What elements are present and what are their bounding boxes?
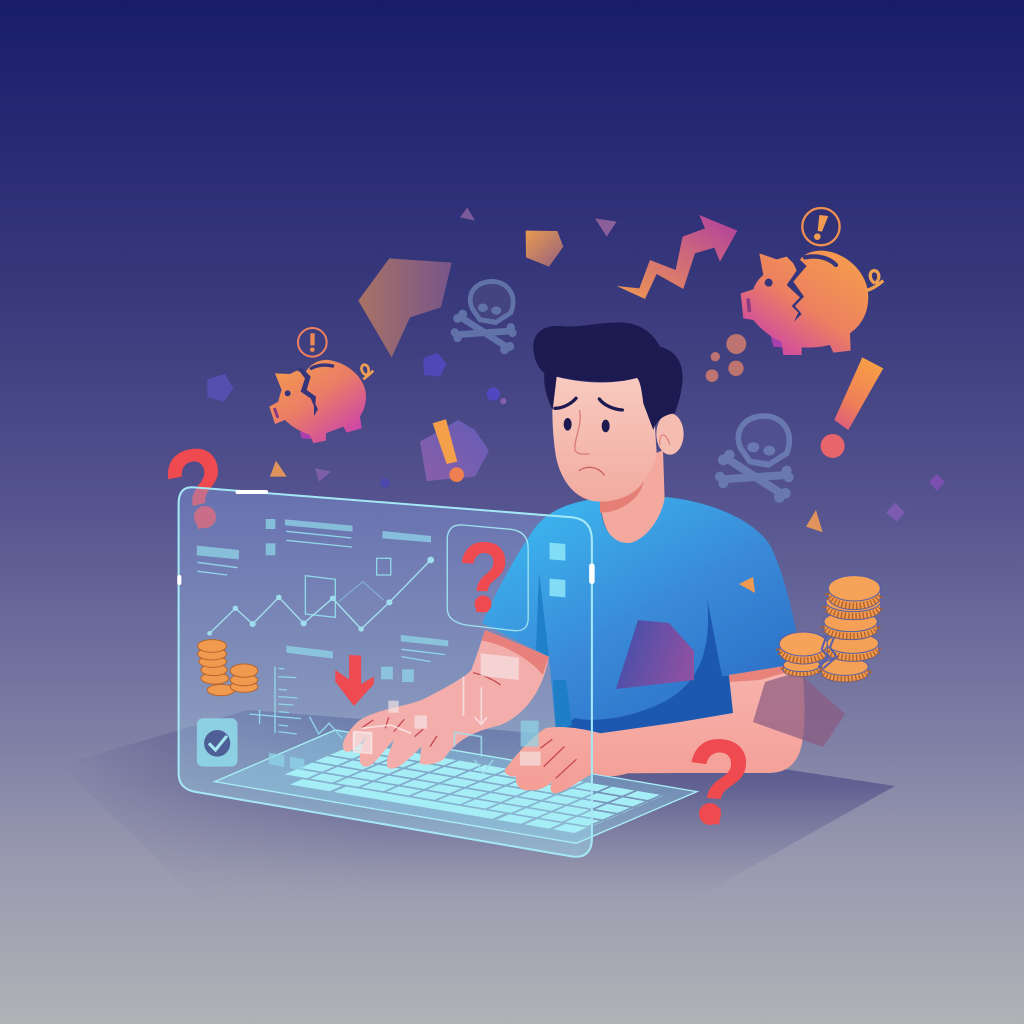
exclamation mark [433,419,464,482]
purple hexagon [420,420,489,481]
large piggy bank [741,251,883,355]
shirt shading [556,598,733,735]
glass outline [179,487,592,857]
red down arrow [335,655,374,706]
coins inside panel [198,640,258,696]
eyebrows [555,398,622,410]
triangle on shirt [739,577,755,593]
purple diamond [886,503,905,522]
small dots [381,387,506,487]
checkmark tile [197,718,238,767]
dashboard text bars [197,519,448,682]
tall coin stack [822,576,881,682]
red question mark, bottom right: ? [679,712,756,853]
skull and crossbones, left [451,281,517,354]
floor shadow [114,710,895,870]
face [552,377,657,502]
cluster of dots [706,334,746,382]
purple dot far right [929,474,945,491]
alert coin above large pig [802,208,840,245]
small triangle [460,207,475,221]
shirt folds [536,573,549,657]
dark dot near panel top [380,478,390,488]
orange pentagon [526,231,563,267]
right arm and hand [505,667,805,793]
right sleeve hem [729,665,791,682]
holographic glass panel [177,487,595,857]
small piggy bank [269,360,373,443]
question mark in panel card: ? [458,522,510,633]
glass panel pane [179,487,592,857]
person [343,323,845,793]
translucent polygon on elbow [753,672,845,747]
short coin stack [779,632,827,677]
t-shirt [482,497,802,735]
orange triangle [270,461,287,477]
chin shadow [600,481,644,513]
coin crack [818,635,837,668]
floating shapes: left group [207,207,506,487]
purple triangle [595,218,617,237]
small glass squares [550,543,565,597]
key grid [269,743,664,833]
red question mark, top left: ? [152,420,243,558]
orange triangle [806,510,823,532]
large brown polygon [358,258,452,357]
zigzag arrow [617,215,737,299]
head [533,323,684,513]
blue pentagon left [207,374,233,402]
purple dot [500,398,506,404]
ear [656,413,684,455]
skull and crossbones, right [715,416,794,503]
alert coin above small pig [298,328,327,357]
left arm and hand [343,630,549,769]
coin stacks, right [779,576,881,682]
nose [575,410,589,454]
edge highlights [177,490,595,585]
keyboard [215,730,697,843]
line chart [207,557,434,636]
shirt pocket [616,620,694,689]
arrows and lines over arm [354,677,493,773]
large exclamation mark [821,357,883,458]
mouth [579,467,604,475]
question mark card frame [447,525,528,631]
arms and hands [343,630,805,793]
floating shapes: right group [500,208,905,532]
hair [533,323,683,430]
blue pentagon right [423,353,447,377]
purple triangle [315,468,331,482]
eyes [564,418,610,432]
neck [600,450,665,544]
